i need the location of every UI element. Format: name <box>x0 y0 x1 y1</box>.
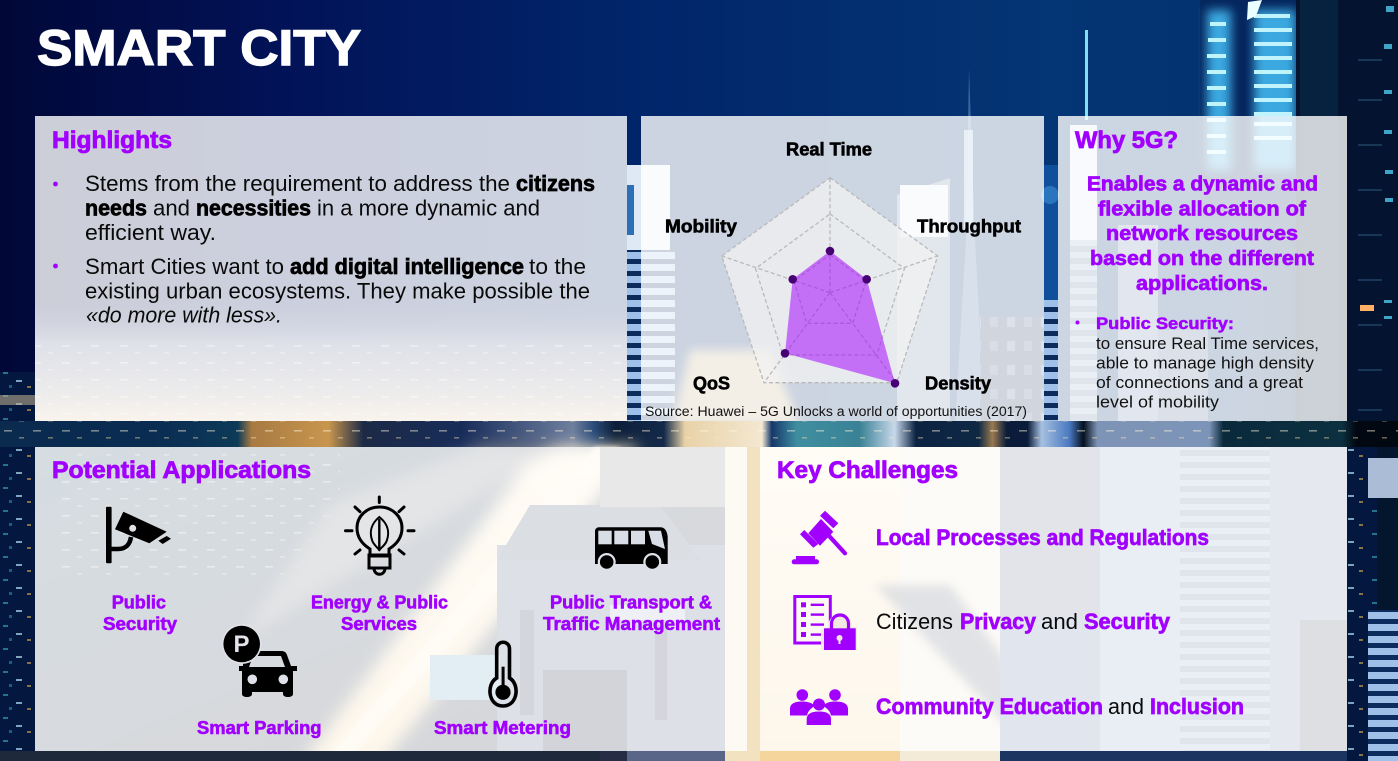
icon: document with lock <box>795 596 857 650</box>
label: public transport and traffic management: Traffic Management <box>543 613 720 634</box>
bullet: public security: Public Security: <box>1096 314 1234 333</box>
label: smart parking: Smart Parking <box>197 717 322 738</box>
bullet list: highlights: to the <box>529 254 586 279</box>
radar axis labels: Throughput <box>917 216 1021 236</box>
challenge: community education and inclusion: Inclusion <box>1150 694 1244 719</box>
challenge: citizens privacy and security: Privacy <box>960 609 1037 634</box>
bullet list: highlights: Smart Cities want to <box>85 254 284 279</box>
key statement: Enables a dynamic and <box>1087 173 1318 196</box>
challenge: citizens privacy and security: Security <box>1084 609 1171 634</box>
title: SMART CITY <box>37 20 361 76</box>
bullet list: highlights: citizens <box>516 171 595 196</box>
icon: smart parking: P <box>233 631 250 658</box>
label: public transport and traffic management <box>543 592 720 634</box>
challenge: citizens privacy and security <box>876 609 1171 634</box>
bullet: public security: level of mobility <box>1096 393 1220 411</box>
bullet: public security: able to manage high density <box>1096 354 1315 372</box>
challenge: citizens privacy and security: Citizens <box>876 609 953 634</box>
panel: potential applications <box>35 447 747 751</box>
panel: radar chart <box>641 116 1044 421</box>
label: energy and public services: Energy & Public <box>311 592 448 613</box>
bullet list: highlights <box>53 171 595 328</box>
radar axis labels: Density <box>925 374 991 394</box>
heading: why 5G: Why 5G? <box>1075 127 1178 154</box>
challenge: local processes: Local Processes and Regulations <box>876 525 1209 550</box>
bullet list: highlights: add digital intelligence <box>290 254 524 279</box>
icon: thermometer <box>490 642 516 706</box>
icon: light bulb with leaf <box>346 497 414 574</box>
radar axis labels: Mobility <box>665 216 737 236</box>
bullet list: highlights: efficient way. <box>85 220 216 245</box>
challenge: community education and inclusion <box>876 694 1244 719</box>
panel: key challenges <box>760 447 1347 751</box>
source note: Source: Huawei – 5G Unlocks a world of opportunities (2017) <box>645 404 1027 419</box>
key statement: flexible allocation of <box>1098 198 1306 221</box>
radar data polygon <box>785 251 895 383</box>
panel: why 5G <box>1058 116 1347 421</box>
bullet list: highlights: Stems from the requirement to address the <box>85 171 510 196</box>
key statement: network resources <box>1106 222 1298 245</box>
bullet list: highlights: «do more with less». <box>86 303 282 328</box>
icon: smart parking <box>222 624 297 697</box>
label: smart metering: Smart Metering <box>434 717 571 738</box>
bullet list: highlights: in a more dynamic and <box>317 196 540 220</box>
challenge: community education and inclusion: and <box>1108 694 1144 719</box>
key statement <box>1087 173 1318 295</box>
radar axis labels: QoS <box>693 374 730 394</box>
label: energy and public services <box>311 592 448 634</box>
heading: key challenges: Key Challenges <box>777 457 958 484</box>
radar data points <box>781 247 899 388</box>
panel: highlights <box>35 116 627 421</box>
icon: bus <box>595 527 668 571</box>
icon: security camera <box>106 507 171 563</box>
bullet list: highlights: existing urban ecosystems. They make possible the <box>85 278 590 304</box>
bullet: public security: of connections and a great <box>1096 374 1303 392</box>
bullet list: highlights: needs <box>85 196 147 220</box>
label: public security: Security <box>103 613 178 634</box>
label: public security: Public <box>112 592 166 613</box>
label: public transport and traffic management: Public Transport & <box>550 592 712 613</box>
radar axis labels <box>665 140 1021 394</box>
bullet: public security <box>1076 314 1319 411</box>
challenge: citizens privacy and security: and <box>1041 609 1078 634</box>
radar axis labels: Real Time <box>786 140 872 160</box>
label: public security <box>103 592 178 634</box>
key statement: applications. <box>1136 272 1268 295</box>
bullet list: highlights: and <box>153 196 190 220</box>
label: energy and public services: Services <box>341 613 417 634</box>
heading: highlights: Highlights <box>52 127 172 154</box>
heading: potential applications: Potential Applications <box>52 457 311 484</box>
bullet: public security: to ensure Real Time services, <box>1096 335 1319 353</box>
icon: people group <box>790 689 848 725</box>
bullet list: highlights: necessities <box>196 196 311 220</box>
key statement: based on the different <box>1090 247 1314 270</box>
radar grid <box>722 178 938 383</box>
challenge: community education and inclusion: Community Education <box>876 694 1103 719</box>
icon: gavel <box>792 511 845 564</box>
